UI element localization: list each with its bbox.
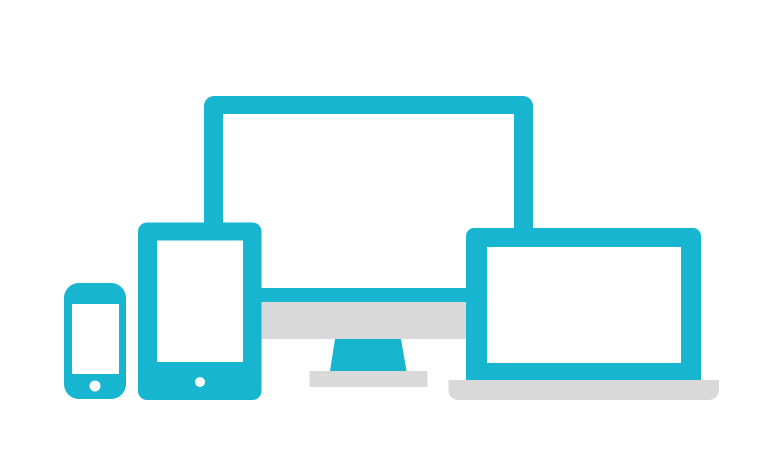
icon: desktop monitor: [204, 96, 533, 387]
icon: tablet: [138, 222, 262, 400]
icon: smartphone: [64, 283, 126, 399]
icon: laptop: [448, 228, 719, 400]
